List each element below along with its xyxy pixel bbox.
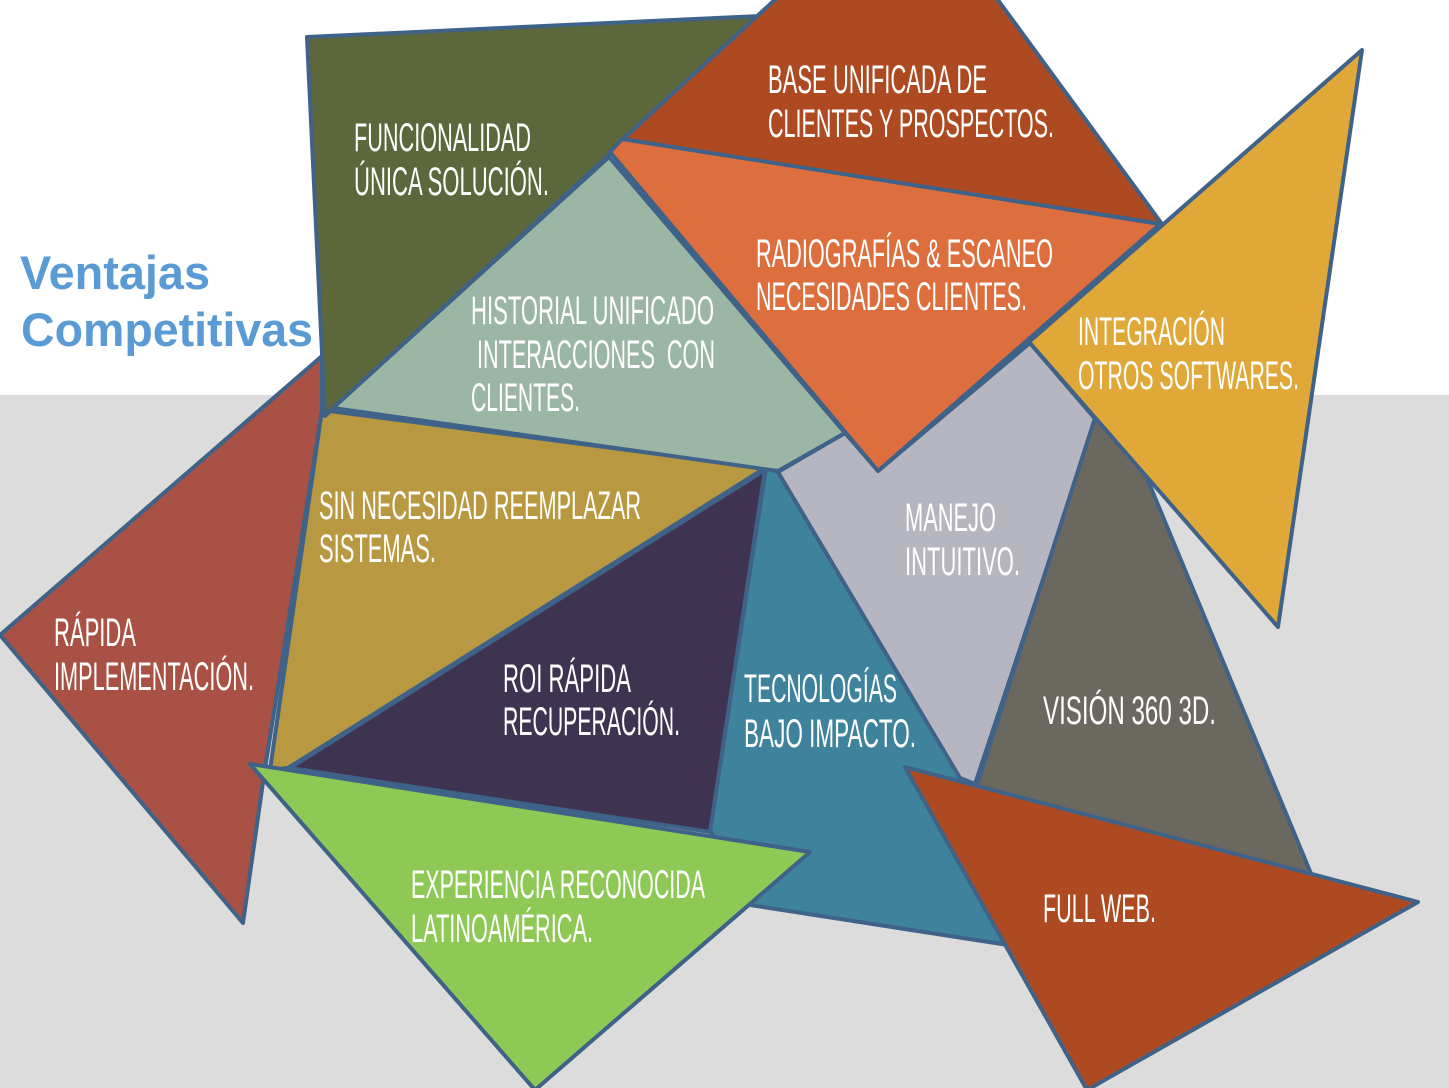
panel: manejo intuitivo: MANEJO <box>905 496 996 540</box>
panel: visión 360 3D <box>976 418 1312 876</box>
panel: integración otros softwares: INTEGRACIÓN <box>1078 309 1225 354</box>
panel: base unificada: BASE UNIFICADA DE <box>768 58 987 102</box>
panel: tecnologías bajo impacto: TECNOLOGÍAS <box>744 666 897 711</box>
panel: rápida implementación: IMPLEMENTACIÓN. <box>54 654 254 699</box>
panel: base unificada: CLIENTES Y PROSPECTOS. <box>768 102 1054 146</box>
title: Competitivas <box>21 303 313 356</box>
title <box>20 246 313 356</box>
panel: sin necesidad reemplazar sistemas: SISTEMAS. <box>319 527 436 571</box>
panel: manejo intuitivo: INTUITIVO. <box>905 540 1020 584</box>
panel: full web: FULL WEB. <box>1043 887 1156 931</box>
panel: historial unificado: HISTORIAL UNIFICADO <box>471 289 714 333</box>
panel: tecnologías bajo impacto <box>710 468 1008 945</box>
panel: experiencia reconocida latinoamérica: EXPERIENCIA RECONOCIDA <box>411 863 705 907</box>
panel: sin necesidad reemplazar sistemas: SIN NECESIDAD REEMPLAZAR <box>319 484 641 528</box>
panel: experiencia reconocida latinoamérica <box>250 764 810 1088</box>
panel: funcionalidad única solución <box>307 16 760 416</box>
panel: visión 360 3D: VISIÓN 360 3D. <box>1043 688 1216 733</box>
panel: experiencia reconocida latinoamérica: LATINOAMÉRICA. <box>411 906 593 951</box>
panel: historial unificado: CLIENTES. <box>471 376 580 420</box>
panel: radiografías y escaneo <box>610 139 1160 471</box>
panel: roi rápida recuperación <box>290 470 765 832</box>
panel: rápida implementación: RÁPIDA <box>54 610 136 655</box>
panel: base unificada <box>622 0 1162 224</box>
panel: roi rápida recuperación: ROI RÁPIDA <box>503 656 631 701</box>
panel: roi rápida recuperación: RECUPERACIÓN. <box>503 699 680 744</box>
panel: integración otros softwares <box>1029 50 1362 627</box>
panel: funcionalidad única solución: ÚNICA SOLUCIÓN. <box>354 159 549 204</box>
panel: tecnologías bajo impacto: BAJO IMPACTO. <box>744 712 916 756</box>
panel: rápida implementación <box>0 356 322 923</box>
panel: full web <box>905 767 1418 1088</box>
title: Ventajas <box>20 246 210 299</box>
panel: manejo intuitivo <box>778 343 1096 784</box>
panel: radiografías y escaneo: NECESIDADES CLIENTES. <box>756 275 1027 319</box>
panel: historial unificado <box>333 157 845 471</box>
panel: funcionalidad única solución: FUNCIONALIDAD <box>354 116 531 160</box>
panel: historial unificado: INTERACCIONES CON <box>477 333 715 377</box>
panel: sin necesidad reemplazar sistemas <box>270 410 765 770</box>
panel: radiografías y escaneo: RADIOGRAFÍAS & ESCANEO <box>756 231 1053 276</box>
